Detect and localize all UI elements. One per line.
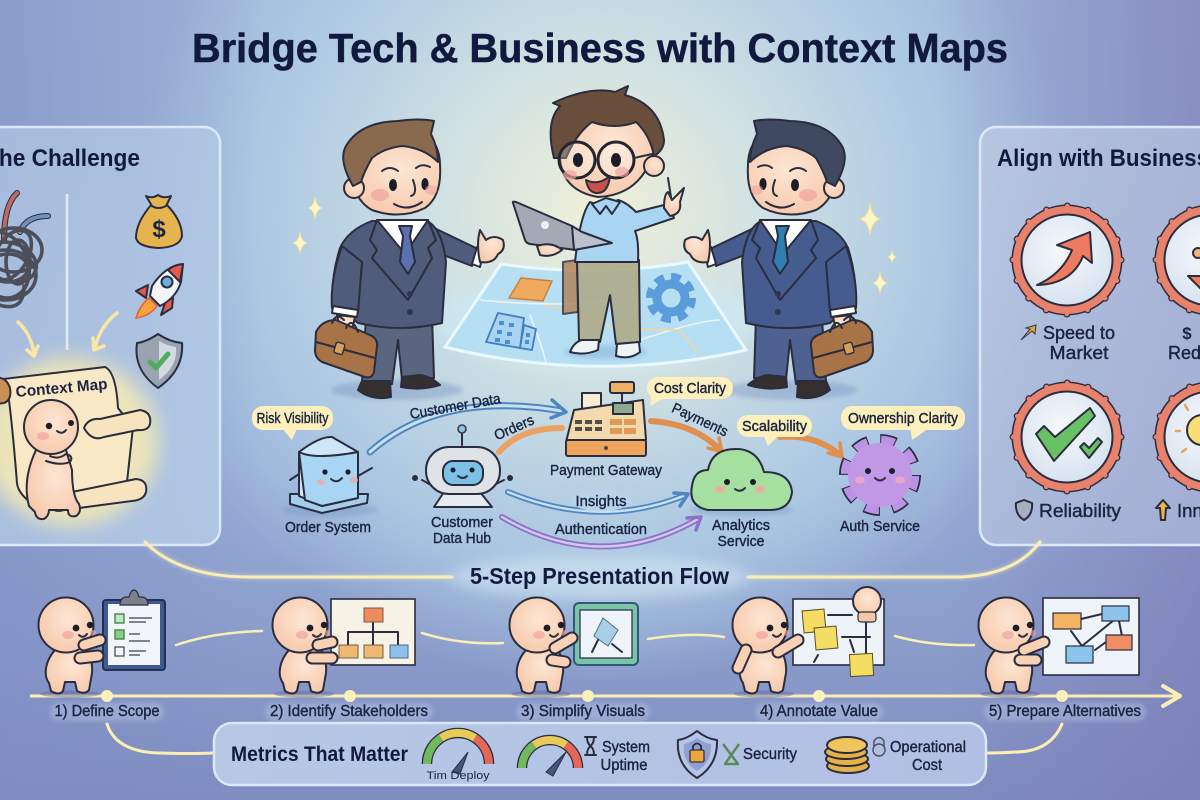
label: speed to market: Speed to: [1043, 323, 1115, 343]
panel: the challenge: [0, 127, 220, 545]
diagram: system context map: [252, 377, 965, 550]
label: customer data: Customer Data: [409, 391, 503, 423]
node: analytics service: [690, 449, 794, 516]
timeline arrow: [30, 686, 1180, 706]
panel: align with business: [980, 127, 1200, 545]
label: speed to market: [1021, 323, 1115, 363]
label: payments: Payments: [669, 400, 730, 440]
badge: innovation: [1154, 382, 1200, 492]
decorative sparkles: [293, 197, 896, 294]
arrow: orders: [499, 428, 562, 452]
icon: tangled wires: [0, 193, 48, 307]
icon: money bag: $: [152, 216, 166, 243]
heading: 5-step presentation flow: [450, 555, 750, 599]
label: step 2: 2) Identify Stakeholders: [270, 703, 428, 720]
badge: reduce cost: [1154, 204, 1200, 316]
badge: reliability: [1012, 382, 1122, 492]
step connectors: [176, 631, 974, 645]
arrow: authentication: [502, 517, 701, 547]
illustration: context map scroll: [0, 358, 158, 526]
panel: metrics that matter: [214, 723, 986, 785]
icon: gear: [651, 278, 691, 318]
arrow: payments: [651, 421, 722, 452]
icon: coin stack: [825, 737, 869, 773]
arrow: scalability to auth: [780, 437, 842, 457]
connector: steps to metrics: [107, 724, 1062, 754]
icon: annotated board: [793, 587, 884, 677]
illustration: developer with laptop: [513, 86, 684, 359]
icon: shield: [136, 334, 182, 388]
label: payment gateway: Payment Gateway: [550, 462, 662, 479]
label: system uptime: Uptime: [600, 757, 648, 774]
label: operational cost: Cost: [912, 757, 943, 774]
step 1: define scope: [38, 590, 165, 698]
step 3: simplify visuals: [510, 598, 638, 698]
label: authentication: Authentication: [555, 522, 647, 538]
callout: cost clarity: Cost Clarity: [654, 381, 727, 397]
callout: scalability: [737, 415, 812, 446]
icon: hourglass: [585, 737, 596, 755]
icon: tablet: [574, 603, 638, 665]
label: step 1: 1) Define Scope: [54, 703, 160, 720]
label: auth service: Auth Service: [840, 518, 920, 535]
node: order system: [282, 437, 378, 517]
label: order system: Order System: [285, 519, 371, 536]
icon: clipboard: [103, 590, 165, 670]
label: analytics service: Service: [718, 533, 764, 550]
label: reduce cost: $: [1182, 324, 1192, 343]
label: customer data hub: Customer: [431, 514, 493, 531]
arrows: towards context map: [18, 313, 117, 356]
connector: panels to flow title: [145, 542, 1040, 577]
step 4: annotate value: [732, 587, 884, 698]
label: security: Security: [743, 746, 797, 763]
icon: org chart board: [331, 599, 415, 665]
icon: security tools: [723, 744, 739, 764]
heading: metrics that matter: Metrics That Matter: [231, 743, 408, 766]
label: step 5: 5) Prepare Alternatives: [989, 703, 1141, 720]
label: analytics service: Analytics: [712, 517, 770, 534]
callout: ownership clarity: Ownership Clarity: [848, 411, 959, 427]
icon: buildings: [486, 313, 536, 350]
illustration: right business person: [684, 120, 873, 400]
label: customer data hub: Data Hub: [433, 530, 491, 547]
callout: risk visibility: [252, 406, 333, 440]
icon: money bag: [136, 195, 182, 248]
label: reliability: Reliability: [1039, 500, 1122, 521]
label: orders: Orders: [492, 412, 537, 444]
step 2: identify stakeholders: [272, 598, 415, 698]
label: innovation: [1156, 500, 1200, 521]
icon: rocket: [136, 264, 183, 318]
label: step 3: 3) Simplify Visuals: [521, 703, 645, 720]
step 5: prepare alternatives: [978, 598, 1139, 698]
node: customer data hub: [412, 425, 513, 507]
label: speed to market: Market: [1050, 343, 1108, 363]
arrow: customer data: [370, 400, 566, 452]
icon: alternatives board: [1043, 598, 1139, 675]
node: payment gateway: [566, 382, 646, 456]
title: Bridge Tech & Business with Context Maps: [192, 25, 1008, 71]
callout: scalability: Scalability: [742, 419, 808, 435]
callout: risk visibility: Risk Visibility: [256, 411, 329, 427]
chart: deploy time gauge: [427, 733, 489, 774]
label: system uptime: System: [602, 739, 650, 756]
heading: 5-step presentation flow: 5-Step Presentation Flow: [470, 563, 729, 589]
arrow: insights: [508, 492, 688, 512]
chart: uptime gauge: [522, 740, 578, 776]
illustration: left business person: [315, 120, 504, 400]
label: operational cost: Operational: [890, 739, 966, 756]
label: insights: Insights: [576, 494, 626, 510]
label: context map: Context Map: [15, 376, 108, 401]
label: reduce cost: [1168, 324, 1200, 363]
label: deploy time: Tim Deploy: [426, 770, 490, 782]
callout: ownership clarity: [841, 406, 965, 440]
label: insights: [571, 491, 631, 511]
icon: lock: [873, 738, 885, 756]
badge: speed to market: [1012, 204, 1122, 316]
node: auth service: [846, 441, 914, 509]
illustration: glowing context map plate: [435, 262, 755, 370]
label: step 4: 4) Annotate Value: [760, 703, 878, 720]
icon: floor plan: [509, 278, 552, 301]
icon: security shield: [678, 731, 717, 778]
callout: cost clarity: [647, 377, 733, 406]
